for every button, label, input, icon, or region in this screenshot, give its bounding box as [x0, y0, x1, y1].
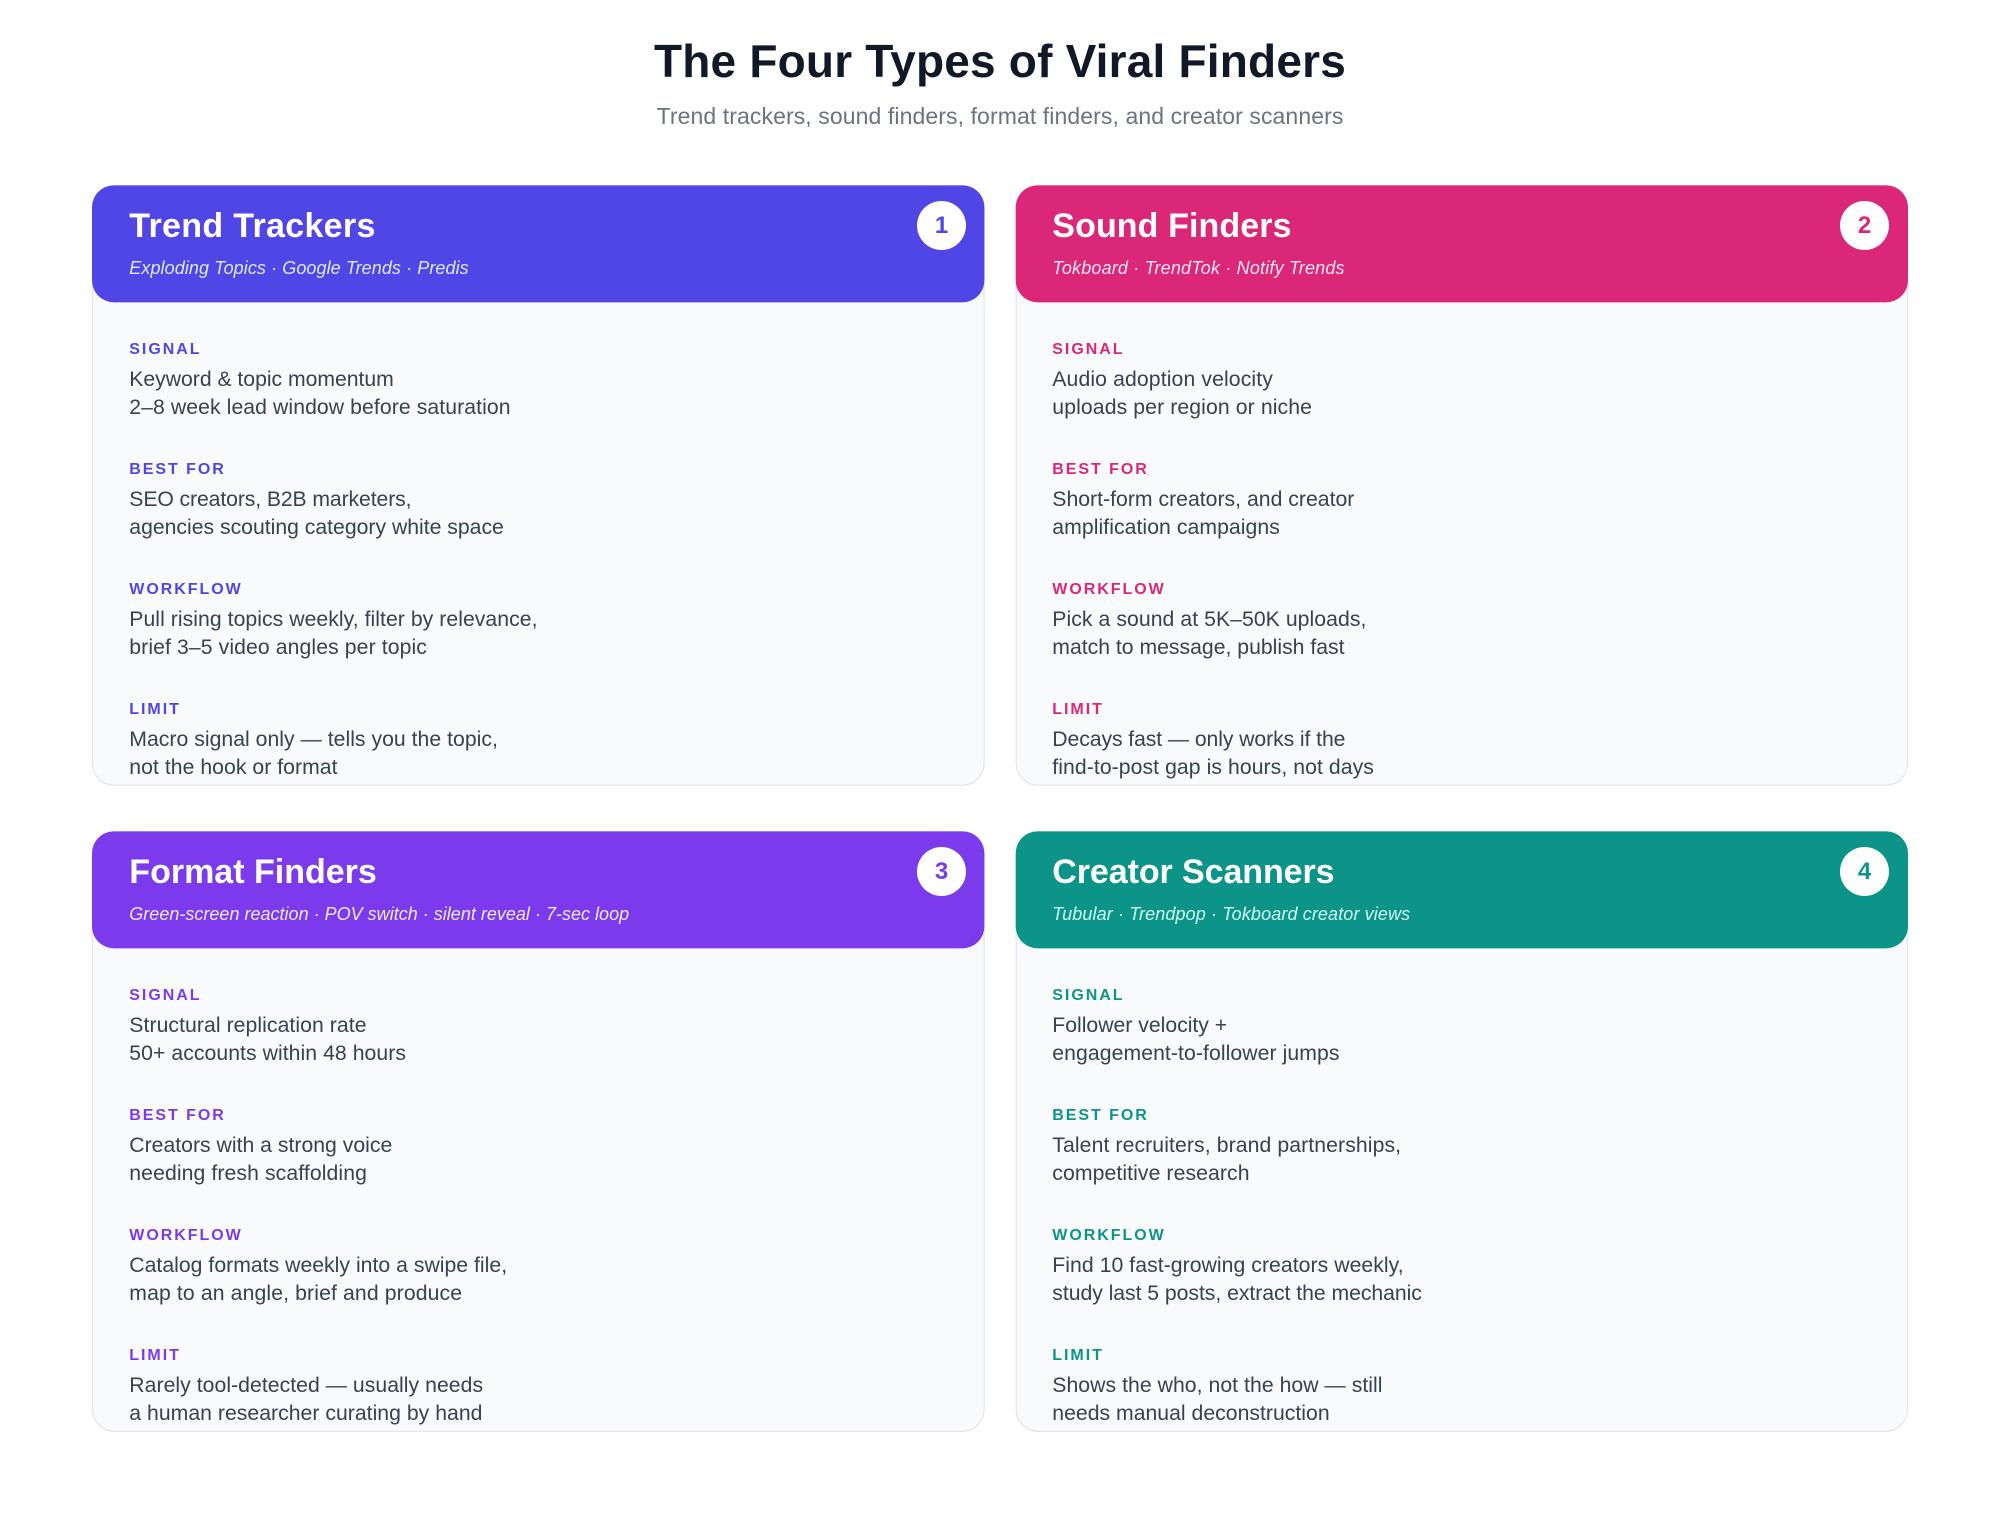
limit: find-to-post gap is hours, not days [1052, 756, 1374, 778]
workflow [129, 581, 538, 658]
panel: Sound Finders [1016, 185, 1908, 786]
panel: Trend Trackers [92, 185, 985, 786]
workflow: WORKFLOW [1052, 1227, 1166, 1244]
badge: 1 [917, 201, 966, 250]
signal: Structural replication rate [129, 1014, 367, 1037]
workflow: study last 5 posts, extract the mechanic [1052, 1282, 1422, 1304]
title: The Four Types of Viral Finders [654, 35, 1346, 87]
signal: 50+ accounts within 48 hours [129, 1042, 406, 1064]
best for [129, 1107, 392, 1184]
subtitle: Trend trackers, sound finders, format finders, and creator scanners [657, 103, 1343, 129]
best for: Creators with a strong voice [129, 1134, 392, 1157]
best for: agencies scouting category white space [129, 516, 504, 538]
header: Trend Trackers: Trend Trackers [129, 207, 376, 245]
workflow: Find 10 fast-growing creators weekly, [1052, 1254, 1404, 1277]
best for: Short-form creators, and creator [1052, 488, 1354, 511]
header: Sound Finders: Sound Finders [1052, 207, 1292, 245]
signal: Follower velocity + [1052, 1014, 1227, 1037]
signal [129, 341, 511, 418]
limit: Decays fast — only works if the [1052, 728, 1345, 751]
workflow: match to message, publish fast [1052, 636, 1345, 658]
signal: SIGNAL [129, 987, 201, 1004]
signal: SIGNAL [1052, 987, 1124, 1004]
workflow: Catalog formats weekly into a swipe file, [129, 1254, 507, 1277]
badge: 3: 3 [935, 858, 948, 885]
badge: 3 [917, 847, 966, 896]
signal [129, 987, 406, 1064]
header: Trend Trackers: Exploding Topics · Google Trends · Predis [129, 258, 469, 278]
limit: Shows the who, not the how — still [1052, 1374, 1383, 1397]
limit: Rarely tool-detected — usually needs [129, 1374, 483, 1397]
badge: 1: 1 [935, 212, 948, 239]
header: Format Finders [92, 831, 984, 948]
limit: LIMIT [1052, 1347, 1104, 1364]
best for: BEST FOR [1052, 1107, 1149, 1124]
limit: LIMIT [1052, 701, 1104, 718]
limit: LIMIT [129, 1347, 181, 1364]
badge: 4: 4 [1858, 858, 1871, 885]
workflow: brief 3–5 video angles per topic [129, 636, 427, 658]
header: Trend Trackers [92, 185, 984, 302]
panel: Format Finders [92, 831, 985, 1432]
signal: engagement-to-follower jumps [1052, 1042, 1340, 1064]
best for: needing fresh scaffolding [129, 1162, 367, 1184]
limit [129, 1347, 483, 1424]
signal: SIGNAL [1052, 341, 1124, 358]
workflow: map to an angle, brief and produce [129, 1282, 462, 1304]
signal [1052, 341, 1312, 418]
workflow [1052, 1227, 1422, 1304]
limit [1052, 701, 1374, 778]
workflow: Pick a sound at 5K–50K uploads, [1052, 608, 1366, 631]
best for: BEST FOR [129, 1107, 226, 1124]
best for: Talent recruiters, brand partnerships, [1052, 1134, 1401, 1157]
best for [129, 461, 504, 538]
limit: LIMIT [129, 701, 181, 718]
best for: BEST FOR [1052, 461, 1149, 478]
workflow: Pull rising topics weekly, filter by relevance, [129, 608, 538, 631]
limit: a human researcher curating by hand [129, 1402, 482, 1424]
workflow [1052, 581, 1366, 658]
header: Sound Finders: Tokboard · TrendTok · Notify Trends [1052, 258, 1345, 278]
best for: BEST FOR [129, 461, 226, 478]
header: Format Finders: Format Finders [129, 853, 377, 891]
workflow: WORKFLOW [129, 1227, 243, 1244]
signal: 2–8 week lead window before saturation [129, 396, 511, 418]
signal: uploads per region or niche [1052, 396, 1312, 418]
panel: Creator Scanners [1016, 831, 1908, 1432]
header: Creator Scanners [1016, 831, 1908, 948]
header: Format Finders: Green-screen reaction · POV switch · silent reveal · 7-sec loop [129, 904, 629, 924]
best for [1052, 461, 1354, 538]
badge: 2: 2 [1858, 212, 1871, 239]
best for: amplification campaigns [1052, 516, 1280, 538]
header: Creator Scanners: Creator Scanners [1052, 853, 1334, 891]
workflow: WORKFLOW [129, 581, 243, 598]
badge: 4 [1840, 847, 1889, 896]
workflow: WORKFLOW [1052, 581, 1166, 598]
header: Creator Scanners: Tubular · Trendpop · Tokboard creator views [1052, 904, 1410, 924]
limit: Macro signal only — tells you the topic, [129, 728, 498, 751]
best for [1052, 1107, 1401, 1184]
signal: SIGNAL [129, 341, 201, 358]
signal: Audio adoption velocity [1052, 368, 1273, 391]
header: Sound Finders [1016, 185, 1908, 302]
signal: Keyword & topic momentum [129, 368, 394, 391]
best for: competitive research [1052, 1162, 1250, 1184]
limit [129, 701, 498, 778]
limit: needs manual deconstruction [1052, 1402, 1330, 1424]
best for: SEO creators, B2B marketers, [129, 488, 411, 511]
signal [1052, 987, 1340, 1064]
workflow [129, 1227, 507, 1304]
limit: not the hook or format [129, 756, 338, 778]
limit [1052, 1347, 1383, 1424]
badge: 2 [1840, 201, 1889, 250]
